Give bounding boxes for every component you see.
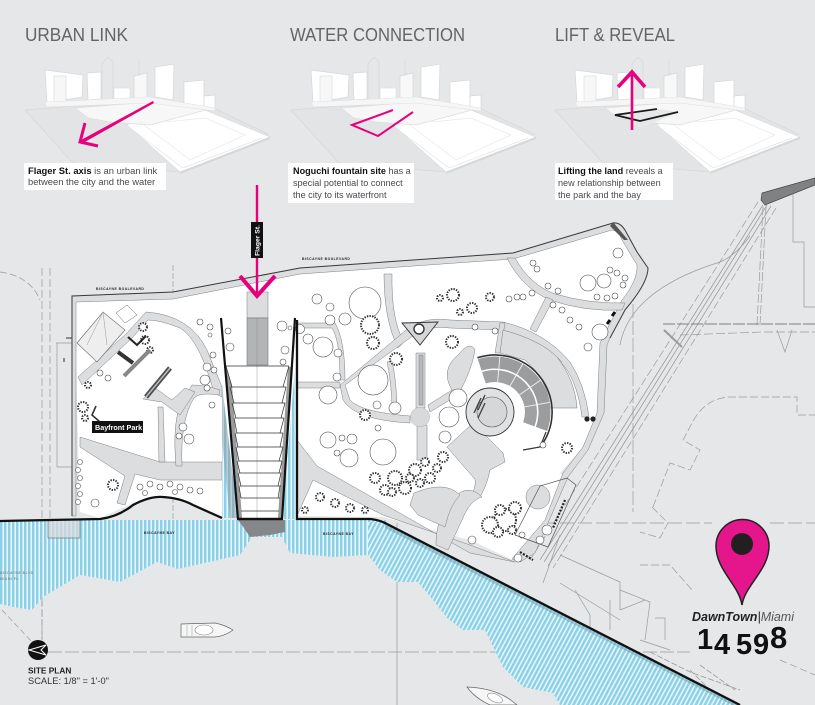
road labels: MIAMI FL — [0, 577, 19, 581]
logo: dawntown miami: DawnTown|Miami — [692, 610, 795, 624]
diagram: lift and reveal massing — [555, 57, 800, 174]
water: biscayne bay — [0, 520, 740, 705]
pier trees — [225, 321, 292, 365]
icon: north arrow — [28, 640, 48, 660]
callout: flager st axis: Flager St. axis is an urban link — [28, 165, 157, 176]
number: 14598: 5 — [736, 629, 752, 661]
diagram: water connection massing — [291, 57, 536, 174]
callout: noguchi fountain: Noguchi fountain site has a — [293, 166, 411, 176]
heading: water connection: WATER CONNECTION — [290, 24, 465, 45]
road labels: BISCAYNE BOULEVARD — [302, 257, 350, 261]
arrow: city to water — [80, 101, 154, 146]
dock — [48, 520, 80, 538]
shoreline — [0, 320, 740, 705]
arrow: lift up — [618, 72, 645, 130]
trees — [76, 248, 628, 562]
diagram: urban link massing — [25, 57, 270, 174]
heading: urban link: URBAN LINK — [25, 24, 129, 45]
arrow: flager st axis — [240, 185, 275, 296]
number: 14598: 8 — [770, 620, 787, 655]
road labels: BISCAYNE BAY — [323, 532, 354, 536]
boat: upper — [181, 623, 233, 637]
label: bayfront park: Bayfront Park — [95, 423, 142, 432]
plaza: fountain — [402, 322, 438, 426]
amphitheatre — [466, 330, 577, 450]
callout: lifting the land — [555, 163, 673, 200]
callout: noguchi fountain: the city to its waterfront — [293, 190, 387, 200]
callout: lifting the land: new relationship between — [558, 178, 661, 188]
road labels: BISCAYNE BAY — [144, 531, 175, 535]
water inlets beside the pier — [222, 345, 297, 519]
site plan scale label: SITE PLAN — [28, 666, 71, 676]
road labels: BISCAYNE BOULEVARD — [96, 287, 144, 291]
callout: lifting the land: the park and the bay — [558, 190, 641, 200]
road labels — [0, 257, 354, 581]
number: 14598: 1 — [697, 624, 713, 656]
icon: map pin — [716, 520, 769, 605]
boat: lower — [467, 687, 517, 705]
number: 14598: 9 — [753, 629, 769, 661]
pier: lifted land — [221, 318, 295, 537]
shrubs — [78, 289, 572, 537]
cut in the land — [615, 109, 680, 128]
outline: fountain site — [352, 110, 413, 136]
number: 14598: 4 — [714, 629, 730, 661]
site plan scale label: SCALE: 1/8" = 1'-0" — [28, 676, 109, 686]
road labels: BISCAYNE BLVD — [0, 571, 34, 575]
park: white ground — [74, 228, 640, 560]
label: bayfront park — [92, 421, 143, 433]
label: flager st: Flager St. — [254, 225, 262, 256]
park: outer road edge — [72, 223, 648, 516]
callout: flager st axis: between the city and the water — [28, 176, 155, 187]
park: structures — [64, 222, 628, 560]
callout: noguchi fountain — [288, 163, 414, 203]
heading: lift and reveal: LIFT & REVEAL — [555, 24, 675, 45]
outline: lifted site — [615, 109, 678, 121]
park: road surfaces — [72, 223, 648, 562]
callout: lifting the land: Lifting the land reveals a — [558, 166, 663, 176]
context linework around the site — [0, 186, 815, 705]
bridge end — [761, 178, 815, 205]
callout: flager st axis — [24, 163, 166, 190]
callout: noguchi fountain: special potential to connect — [293, 178, 403, 188]
